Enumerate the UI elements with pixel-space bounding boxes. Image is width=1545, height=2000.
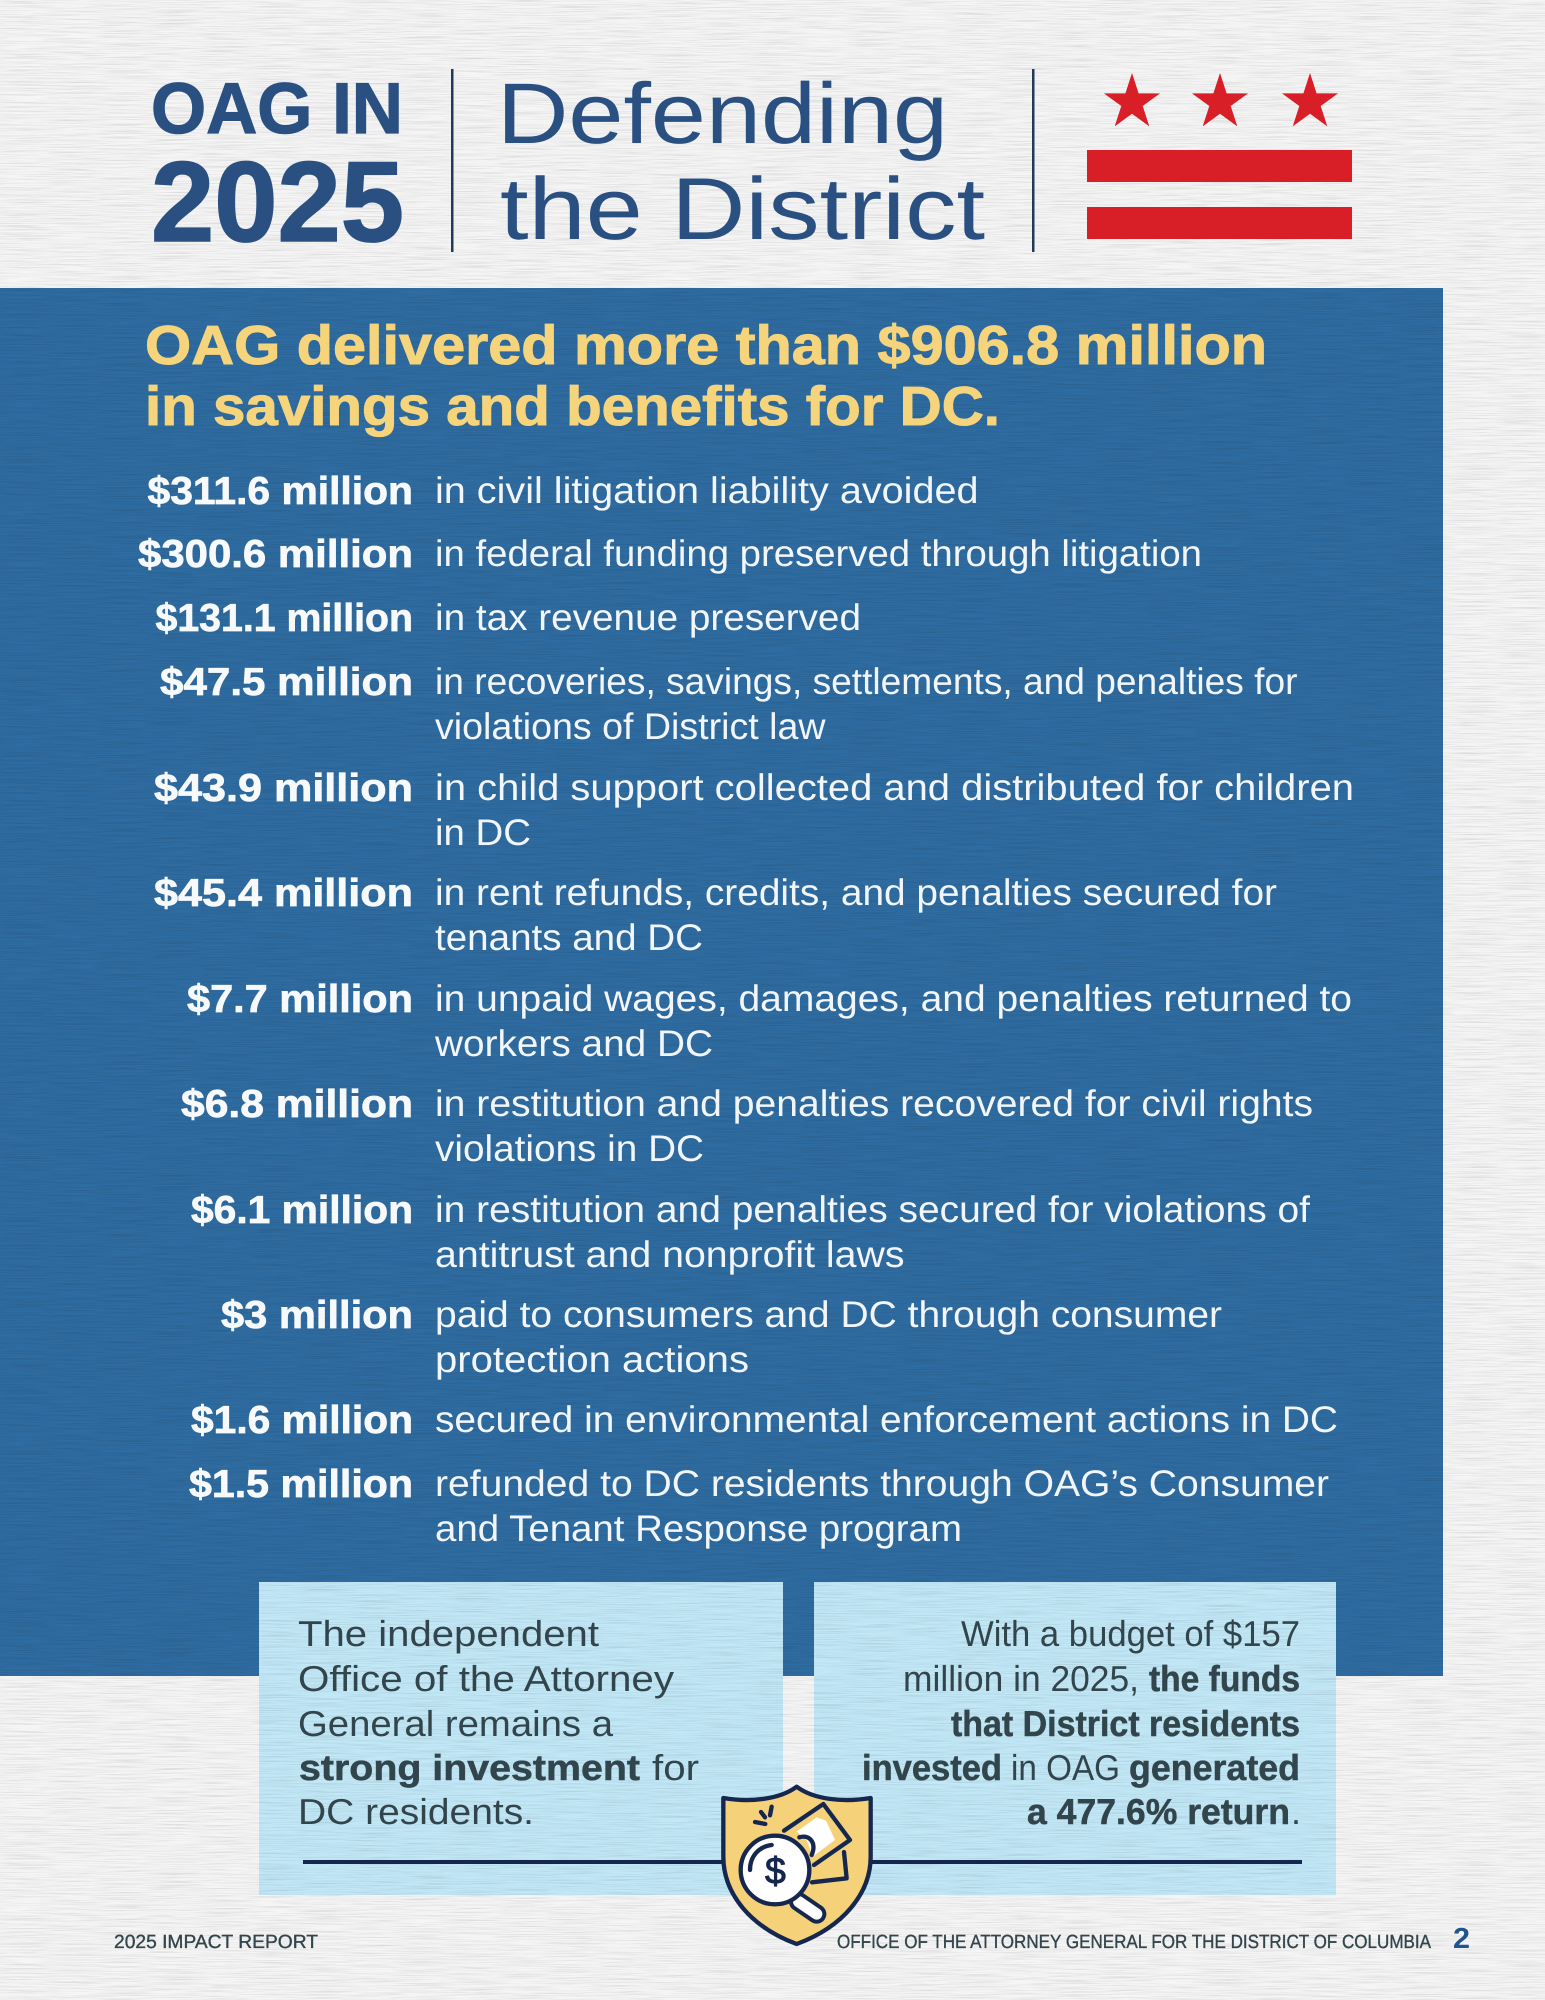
item: rent refunds: $45.4 million [154, 872, 413, 915]
item: civil rights: violations in DC [435, 1128, 704, 1169]
item: rent refunds: tenants and DC [435, 917, 703, 958]
item: consumer and tenant response: and Tenant Response program [435, 1508, 962, 1549]
item: child support: $43.9 million [154, 767, 413, 810]
text: budget return callout: in OAG [1011, 1747, 1120, 1788]
item: unpaid wages: workers and DC [434, 1023, 713, 1064]
rule under callouts [303, 1860, 1302, 1864]
title block: OAG in 2025: OAG IN [151, 69, 403, 149]
title: Defending the District: Defending [497, 66, 948, 162]
heading: savings total [145, 314, 1267, 437]
text: budget return callout: generated [1129, 1747, 1300, 1788]
item: recoveries: $47.5 million [160, 661, 413, 704]
title block: OAG in 2025: 2025 [151, 139, 404, 266]
item: civil litigation [148, 470, 978, 513]
text: budget return callout: With a budget of $157 [961, 1613, 1300, 1654]
item: civil litigation: in civil litigation liability avoided [435, 470, 978, 511]
text: independent office callout: strong investment [299, 1747, 640, 1788]
item: consumer and tenant response [189, 1463, 1329, 1549]
page number: 2 [1453, 1923, 1470, 1955]
divider left [451, 69, 454, 252]
text: budget return callout: that District residents [951, 1703, 1300, 1744]
item: civil rights: $6.8 million [181, 1083, 413, 1126]
text: budget return callout: million in 2025, [903, 1658, 1139, 1699]
text: independent office callout: The independent [298, 1613, 599, 1654]
item: consumer protection: protection actions [435, 1339, 749, 1380]
panel: savings background [0, 288, 1443, 1676]
title: Defending the District: the District [500, 159, 985, 258]
item: antitrust: in restitution and penalties secured for violations of [435, 1189, 1311, 1230]
item: federal funding: in federal funding preserved through litigation [435, 533, 1202, 574]
icon: shield with magnifying glass and money: $ [765, 1850, 786, 1891]
item: civil rights: in restitution and penalties recovered for civil rights [435, 1083, 1313, 1124]
item: consumer protection: paid to consumers and DC through consumer [435, 1294, 1222, 1335]
text: budget return callout [862, 1613, 1301, 1832]
footer: report name: 2025 IMPACT REPORT [114, 1932, 318, 1953]
callout box: budget return [814, 1582, 1336, 1895]
item: rent refunds: in rent refunds, credits, and penalties secured for [435, 872, 1277, 913]
item: recoveries: in recoveries, savings, settlements, and penalties for [435, 661, 1298, 702]
item: recoveries [160, 661, 1298, 747]
item: tax revenue: in tax revenue preserved [435, 597, 861, 638]
footer: office name: OFFICE OF THE ATTORNEY GENERAL FOR THE DISTRICT OF COLUMBIA [837, 1932, 1431, 1953]
heading: savings total: in savings and benefits for DC. [145, 375, 1000, 437]
divider right [1032, 69, 1034, 252]
item: recoveries: violations of District law [435, 706, 826, 747]
text: budget return callout: a 477.6% return [1027, 1791, 1290, 1832]
item: tax revenue [156, 597, 861, 640]
item: antitrust [191, 1189, 1311, 1275]
icon: DC flag [1087, 73, 1352, 239]
text: independent office callout: General remains a [298, 1703, 614, 1744]
item: consumer and tenant response: $1.5 million [189, 1463, 413, 1506]
item: unpaid wages: in unpaid wages, damages, and penalties returned to [435, 978, 1352, 1019]
item: antitrust: $6.1 million [191, 1189, 413, 1232]
item: civil rights [181, 1083, 1313, 1169]
title block: OAG in 2025 [151, 69, 404, 266]
title: Defending the District [497, 66, 985, 258]
icon: shield with magnifying glass and money [723, 1787, 871, 1944]
heading: savings total: OAG delivered more than $906.8 million [145, 314, 1267, 376]
item: civil litigation: $311.6 million [148, 470, 413, 513]
item: child support: in DC [435, 812, 531, 853]
item: consumer protection [221, 1294, 1222, 1380]
list: savings and benefits items [138, 470, 1354, 1549]
text: independent office callout: DC residents. [298, 1791, 534, 1832]
item: consumer and tenant response: refunded to DC residents through OAG’s Consumer [435, 1463, 1329, 1504]
text: budget return callout: the funds [1149, 1658, 1300, 1699]
item: environmental: secured in environmental enforcement actions in DC [435, 1399, 1338, 1440]
callout box: independent office [259, 1582, 783, 1895]
item: child support [154, 767, 1354, 853]
item: tax revenue: $131.1 million [156, 597, 413, 640]
item: child support: in child support collected and distributed for children [435, 767, 1354, 808]
item: environmental: $1.6 million [191, 1399, 413, 1442]
item: unpaid wages [187, 978, 1352, 1064]
text: independent office callout [298, 1613, 699, 1832]
item: rent refunds [154, 872, 1277, 958]
text: budget return callout: . [1291, 1791, 1301, 1832]
text: independent office callout: for [652, 1747, 699, 1788]
item: antitrust: antitrust and nonprofit laws [435, 1234, 904, 1275]
text: budget return callout: invested [862, 1747, 1002, 1788]
item: federal funding [138, 533, 1202, 576]
item: consumer protection: $3 million [221, 1294, 413, 1337]
item: federal funding: $300.6 million [138, 533, 413, 576]
text: independent office callout: Office of the Attorney [298, 1658, 674, 1699]
item: unpaid wages: $7.7 million [187, 978, 413, 1021]
